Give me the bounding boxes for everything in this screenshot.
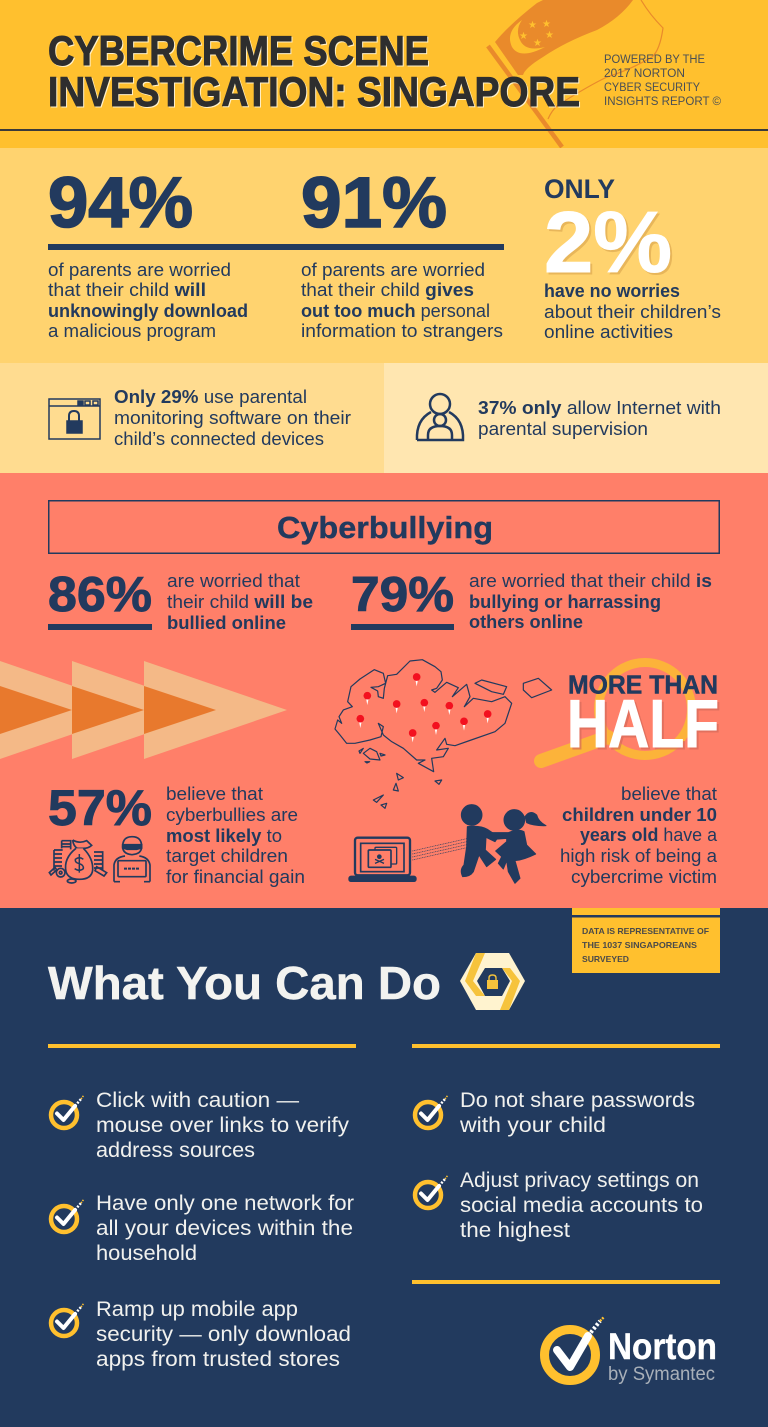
tip: mobile app security: Ramp up mobile app (96, 1297, 298, 1321)
tip: passwords: Do not share passwords (460, 1088, 695, 1112)
icon: hexagon lock (460, 953, 525, 1010)
stat: 86%: bullied online (167, 612, 286, 633)
panel: what you can do (0, 908, 768, 1427)
text: 37% supervision: 37% only allow Internet with (478, 397, 721, 418)
title: CYBERCRIME SCENE (48, 27, 429, 74)
note: data representative: DATA IS REPRESENTATIVE OF (582, 926, 709, 936)
stat: 94%: a malicious program (48, 320, 216, 341)
stat: 91%: information to strangers (301, 320, 503, 341)
text: children under 10 (560, 783, 718, 887)
text: children under 10: high risk of being a (560, 845, 718, 866)
stat: 91%: of parents are worried (301, 259, 485, 280)
text: 29% parental software: Only 29% use parental (114, 386, 307, 407)
source note: POWERED BY THE (604, 54, 705, 66)
title: CYBERCRIME SCENE (49, 28, 430, 75)
source note: INSIGHTS REPORT © (604, 96, 722, 108)
tip: click with caution: Click with caution — (96, 1088, 300, 1112)
panel: cyberbullying (0, 473, 768, 908)
stat: 79%: 79% (351, 568, 454, 622)
stat: only 2%: 2% (546, 197, 674, 293)
title: INVESTIGATION: SINGAPORE (49, 69, 581, 116)
note: data representative (572, 908, 720, 973)
source note (604, 54, 722, 108)
stat: only 2%: 2% (544, 195, 672, 291)
tip: one network: household (96, 1241, 197, 1265)
icon: hacker (114, 837, 150, 882)
icon: Singapore flag: ★ (542, 19, 551, 30)
tip: privacy settings: social media accounts to (460, 1193, 703, 1217)
text: children under 10: children under 10 (562, 804, 717, 825)
stat: 57%: cyberbullies are (166, 804, 298, 825)
tip: privacy settings: the highest (460, 1218, 570, 1242)
icon: locked browser (49, 399, 100, 439)
heading: Cyberbullying (49, 501, 719, 553)
text: children under 10: cybercrime victim (571, 866, 717, 887)
source note: 2017 NORTON (604, 68, 685, 80)
stat: 94% (48, 164, 248, 341)
tip: mobile app security: apps from trusted stores (96, 1347, 340, 1371)
stat: only 2%: have no worries (544, 280, 680, 301)
stat: 91%: that their child gives (301, 279, 474, 300)
map of Singapore with pins (335, 660, 552, 808)
stat: 86%: 86% (48, 568, 152, 622)
stat: 79%: bullying or harrassing (469, 591, 661, 612)
icon: Singapore flag: ★ (545, 30, 554, 41)
stat: 57% (48, 780, 305, 887)
heading: Cyberbullying: Cyberbullying (277, 510, 493, 545)
stat: 57%: for financial gain (166, 866, 305, 887)
stat: 94%: unknowingly download (48, 300, 248, 321)
panel: parent worries (0, 148, 768, 363)
tip: privacy settings: Adjust privacy settings on (460, 1168, 699, 1192)
callout: more than half: HALF (569, 688, 721, 764)
text: 29% parental software: monitoring software on their (114, 407, 351, 428)
stat: only 2% (544, 174, 721, 342)
tip: click with caution: mouse over links to verify (96, 1113, 349, 1137)
title (48, 27, 581, 116)
stat: only 2%: about their children’s (544, 301, 721, 322)
title: INVESTIGATION: SINGAPORE (48, 68, 580, 115)
tip: mobile app security (51, 1297, 351, 1371)
logo: Norton by Symantec: by Symantec (608, 1364, 715, 1385)
text: 37% supervision: parental supervision (478, 418, 648, 439)
text: 29% parental software (114, 386, 351, 449)
stat: only 2%: online activities (544, 321, 673, 342)
icon: arrows (0, 661, 287, 759)
heading: What You Can Do: What You Can Do (48, 957, 441, 1009)
stat: 79%: are worried that their child is (469, 570, 712, 591)
icon: Singapore flag: ★ (533, 38, 542, 49)
stat: 86%: are worried that (167, 570, 300, 591)
source note: CYBER SECURITY (604, 82, 700, 94)
text: 29% parental software: child’s connected devices (114, 428, 324, 449)
text: children under 10: years old have a (580, 824, 718, 845)
stat: 57%: most likely to (166, 825, 282, 846)
stat: 91%: 91% (301, 164, 447, 243)
stat: 94%: of parents are worried (48, 259, 231, 280)
callout: more than half: HALF (567, 686, 719, 762)
icon: laptop with malware (348, 838, 467, 882)
icon: children holding hands (461, 805, 546, 883)
tip: passwords: with your child (459, 1113, 606, 1137)
icon: Singapore flag (488, 0, 663, 147)
icon: Singapore flag: ★ (528, 20, 537, 31)
icon: parent and child (417, 394, 463, 440)
logo: Norton by Symantec: Norton (608, 1326, 717, 1367)
tip: one network: all your devices within the (96, 1216, 353, 1240)
tip: one network: Have only one network for (96, 1191, 354, 1215)
tip: click with caution (51, 1088, 349, 1162)
icon: Singapore flag: ★ (519, 31, 528, 42)
panel: header (0, 0, 768, 148)
stat: 91% (301, 164, 503, 341)
logo: Norton by Symantec (544, 1317, 717, 1385)
tip: click with caution: address sources (96, 1138, 255, 1162)
stat: 94%: 94% (48, 164, 193, 243)
stat: 86%: their child will be (167, 591, 313, 612)
note: data representative: THE 1037 SINGAPOREANS (582, 940, 697, 950)
icon: money bag (49, 840, 107, 883)
stat: 57%: 57% (48, 780, 152, 836)
tip: mobile app security: security — only download (96, 1322, 351, 1346)
stat: 79% (351, 568, 712, 632)
tip: passwords (415, 1088, 695, 1137)
tip: one network (51, 1191, 354, 1265)
stat: only 2%: ONLY (544, 174, 615, 204)
panel: parental monitoring (0, 363, 768, 473)
text: 37% supervision (478, 397, 721, 439)
stat: 79%: others online (469, 611, 583, 632)
note: data representative: SURVEYED (582, 954, 629, 964)
text: children under 10: believe that (621, 783, 717, 804)
stat: 57%: believe that (166, 783, 263, 804)
stat: 57%: target children (166, 845, 288, 866)
icon: magnifying glass (541, 662, 692, 761)
stat: 86% (48, 568, 313, 633)
tip: privacy settings (415, 1168, 703, 1242)
stat: 94%: that their child will (48, 279, 206, 300)
stat: 91%: out too much personal (301, 300, 490, 321)
callout: more than half: MORE THAN (568, 670, 718, 700)
